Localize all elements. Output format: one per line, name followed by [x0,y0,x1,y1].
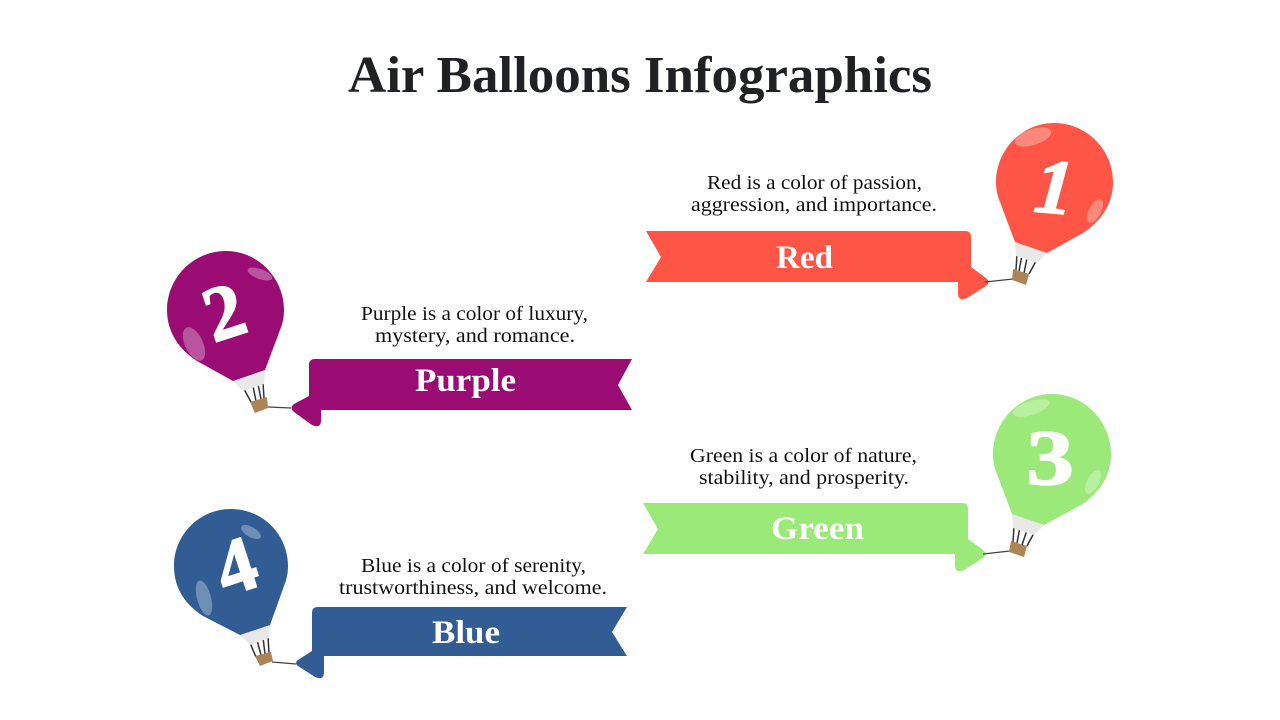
balloon: blue: 4 [204,518,268,613]
panel: purple [167,251,632,426]
description: purple: mystery, and romance. [375,325,575,347]
balloon: red [985,123,1113,285]
ribbon: red [646,231,988,299]
balloon: purple [167,251,291,413]
title: Air Balloons Infographics [348,47,932,104]
description: purple: Purple is a color of luxury, [361,303,588,325]
panel: green [643,394,1111,571]
balloon: green: 3 [1026,414,1074,501]
panel: red [646,123,1113,299]
balloon: purple: 2 [192,264,256,359]
description: red: aggression, and importance. [691,194,937,216]
description: blue: Blue is a color of serenity, [361,555,586,577]
ribbon: blue [296,607,627,678]
ribbon: purple [292,359,632,426]
balloon: red: 1 [1031,141,1078,232]
description: red [691,172,937,216]
panel: blue [174,509,627,678]
ribbon label: purple: Purple [415,363,516,399]
description: green: stability, and prosperity. [699,467,909,489]
description: purple [361,303,588,347]
ribbon label: blue: Blue [432,615,500,651]
description: green: Green is a color of nature, [690,445,917,467]
description: red: Red is a color of passion, [707,172,922,194]
ribbon label: red: Red [776,240,833,276]
balloon: blue [174,509,296,666]
ribbon label: green: Green [771,511,864,547]
description: blue: trustworthiness, and welcome. [339,577,607,599]
ribbon: green [643,503,986,571]
description: green [690,445,917,489]
description: blue [339,555,607,599]
balloon: green [983,394,1111,557]
